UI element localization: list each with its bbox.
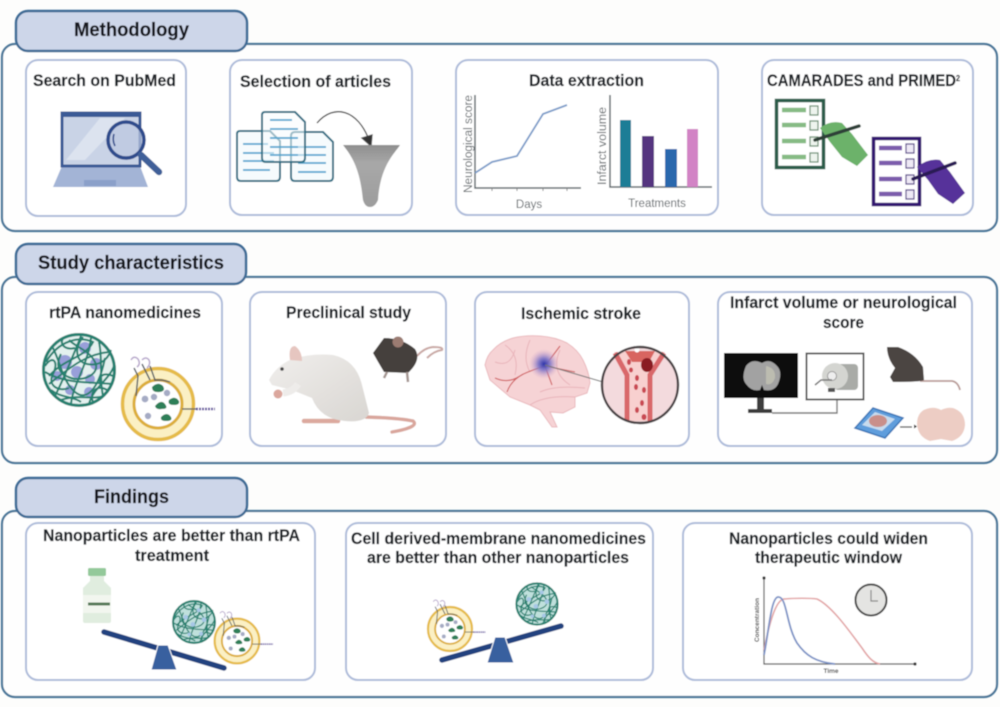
icon: rtPA vial <box>83 568 111 623</box>
icon: dark mouse <box>373 336 442 382</box>
panel: cell derived membrane nanomedicines: Cell derived-membrane nanomedicines <box>351 530 646 548</box>
panel: CAMARADES and PRIMED <box>762 60 973 215</box>
line chart: neurological score: Neurological score <box>463 95 475 193</box>
section: Methodology <box>2 11 997 231</box>
panel: therapeutic window: Nanoparticles could widen <box>729 530 928 548</box>
icon: dark mouse <box>887 347 960 390</box>
icon: white rat <box>269 346 414 432</box>
chart: concentration over time: Concentration <box>754 598 761 642</box>
icon: liposome on balance <box>215 612 273 663</box>
panel: cell derived membrane nanomedicines: are better than other nanoparticles <box>367 549 629 567</box>
icon: clock <box>856 584 886 616</box>
panel: infarct volume or neurological score: Infarct volume or neurological <box>730 294 957 312</box>
study characteristics heading tab <box>16 244 246 284</box>
panel: rtPA nanomedicines: rtPA nanomedicines <box>49 304 201 322</box>
panel: nanoparticles versus rtPA <box>26 523 315 680</box>
bar chart: infarct volume: Infarct volume <box>597 107 609 185</box>
findings heading tab <box>16 478 247 517</box>
icon: polymer nanoparticle <box>44 334 114 406</box>
icon: MRI scanner <box>806 354 864 400</box>
chart: concentration over time <box>754 576 917 675</box>
panel: cell derived membrane nanomedicines <box>346 523 653 680</box>
panel: selection of articles <box>230 60 412 215</box>
panel: CAMARADES and PRIMED: 2 <box>956 74 960 83</box>
icon: liposome <box>122 357 215 440</box>
icon: funnel <box>343 145 400 207</box>
findings heading tab: Findings <box>94 486 169 508</box>
line chart: neurological score: Days <box>516 199 542 211</box>
section: Study characteristics <box>2 244 997 463</box>
line chart: neurological score <box>463 95 581 211</box>
icon: nanoparticle on balance <box>516 583 558 625</box>
panel: data extraction <box>456 60 718 215</box>
methodology heading tab: Methodology <box>74 19 189 41</box>
panel: search on PubMed: Search on PubMed <box>33 72 176 90</box>
panel: ischemic stroke: Ischemic stroke <box>521 305 641 323</box>
icon: tilted balance <box>104 632 224 670</box>
panel: infarct volume or neurological score <box>718 292 972 446</box>
panel: nanoparticles versus rtPA: treatment <box>135 547 209 565</box>
icon: green checklist and hand <box>776 100 868 168</box>
icon: nanoparticle on balance <box>173 601 215 643</box>
panel: CAMARADES and PRIMED: CAMARADES and PRIMED <box>767 72 977 90</box>
panel: selection of articles: Selection of articles <box>240 73 391 91</box>
methodology frame <box>2 44 997 231</box>
icon: stacked documents <box>237 112 333 181</box>
methodology heading tab <box>16 11 247 51</box>
icon: tilted balance <box>442 626 561 663</box>
panel: preclinical study: Preclinical study <box>286 304 412 322</box>
icon: laptop with magnifier <box>53 112 159 187</box>
panel: therapeutic window <box>683 523 972 680</box>
panel: rtPA nanomedicines <box>26 292 222 446</box>
panel: search on PubMed <box>26 60 186 216</box>
study characteristics heading tab: Study characteristics <box>38 252 224 274</box>
icon: monitor with brain scan <box>724 353 837 413</box>
icon: occluded vessel <box>602 347 678 423</box>
panel: infarct volume or neurological score: score <box>823 314 864 332</box>
icon: purple checklist and hand <box>874 138 965 204</box>
study characteristics frame <box>2 277 997 463</box>
panel: data extraction: Data extraction <box>529 72 644 90</box>
panel: ischemic stroke <box>475 292 689 446</box>
findings frame <box>2 511 997 697</box>
panel: preclinical study <box>250 292 446 446</box>
bar chart: infarct volume <box>597 95 712 210</box>
chart: concentration over time: Time <box>823 668 839 675</box>
icon: brain <box>485 336 603 427</box>
arrow: documents to funnel <box>317 112 372 146</box>
icon: liposome on balance <box>428 600 485 651</box>
panel: nanoparticles versus rtPA: Nanoparticles are better than rtPA <box>43 527 300 545</box>
icon: brain slide and slice <box>855 408 965 441</box>
panel: therapeutic window: therapeutic window <box>755 549 902 567</box>
bar chart: infarct volume: Treatments <box>628 198 686 210</box>
section: Findings <box>2 478 997 697</box>
